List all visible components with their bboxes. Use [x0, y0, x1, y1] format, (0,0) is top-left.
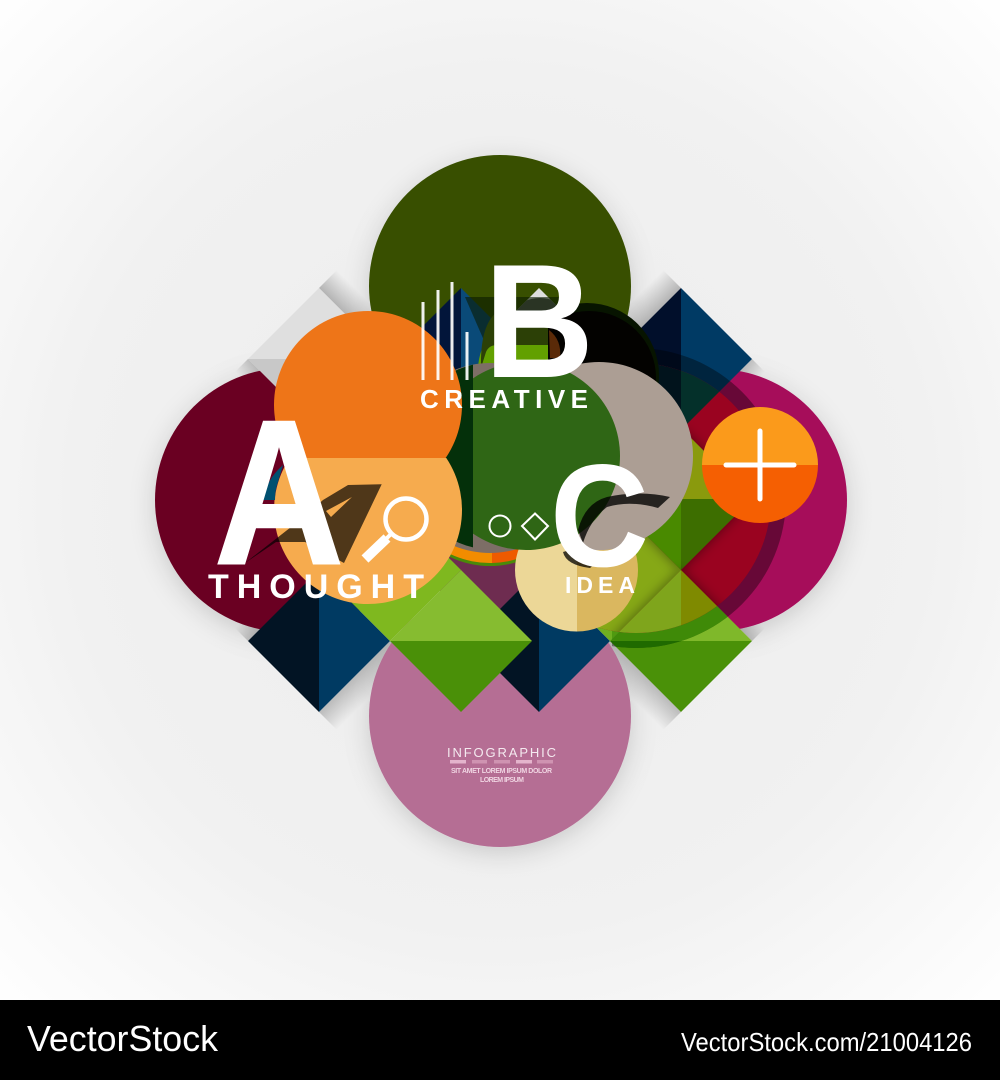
diamond: blue top right: [610, 288, 752, 430]
text block: infographic caption: INFOGRAPHIC: [447, 745, 556, 760]
taupe circle: [505, 362, 693, 550]
letter B: B: [484, 231, 594, 412]
icon: vertical bars: [422, 282, 468, 380]
panel: large background circles: [155, 155, 847, 847]
diamond: grey top left: [248, 288, 390, 430]
grey arc circle: [395, 363, 585, 553]
diamond: green bottom centre: [390, 570, 532, 712]
black circle: [548, 311, 656, 381]
dark outer ring circle: [612, 349, 785, 648]
lime circle behind letter B: [478, 313, 592, 427]
shadow swoosh behind letter C: [578, 494, 670, 543]
brown crescent: [549, 330, 560, 358]
dark arrow shadow behind letter A: [245, 484, 382, 563]
footer logo text: VectorStock: [27, 1018, 219, 1059]
orange arc circle: [450, 546, 518, 563]
text block: infographic caption: [447, 745, 556, 784]
label: THOUGHT: THOUGHT: [208, 568, 424, 606]
letter A: A: [214, 378, 344, 608]
dark transparent shape over top circle: [465, 297, 560, 400]
text block: infographic caption: SIT AMET LOREM IPSUM DOLOR: [451, 768, 552, 775]
ring band over olive diamond: [612, 631, 619, 639]
label: IDEA: IDEA: [565, 572, 635, 598]
letter C: C: [550, 434, 649, 597]
icon: small circle: [490, 516, 510, 536]
footer image id: VectorStock.com/21004126: [681, 1027, 972, 1057]
center backing shape: [440, 540, 560, 620]
footer band: [0, 1000, 1000, 1080]
green rim circle: [396, 378, 584, 566]
diamond: blue bottom left: [248, 570, 390, 712]
arrow notch: [326, 497, 352, 517]
panel: diamonds: [248, 288, 752, 712]
label: CREATIVE: CREATIVE: [420, 384, 588, 414]
ring band over lower green diamond: [610, 641, 681, 648]
beige circle: [515, 543, 638, 632]
black circle halo: [573, 303, 659, 383]
diamond: grey top centre: [516, 288, 556, 310]
blue swoosh behind letter A: [263, 465, 283, 500]
shadow under letter C: [563, 550, 600, 568]
orange split circle: [274, 311, 462, 604]
ring band over upper green diamond: [610, 606, 728, 641]
diamond: olive centre right: [539, 499, 681, 641]
icon: plus button: [702, 407, 818, 523]
diamond: green bottom right: [610, 570, 752, 712]
icon: magnifier: [365, 498, 426, 559]
notch shadows between circles and diamonds: [235, 270, 765, 730]
green circle: [446, 364, 620, 550]
text block: infographic caption: LOREM IPSUM: [480, 777, 524, 784]
panel: inner ring circle contents: [599, 364, 769, 633]
diamond: light green left: [319, 499, 461, 641]
diamond: blue top centre: [390, 288, 532, 430]
diamond: blue bottom centre: [468, 570, 610, 712]
dark olive band inside letter B: [481, 312, 550, 368]
icon: small diamond: [522, 514, 548, 540]
